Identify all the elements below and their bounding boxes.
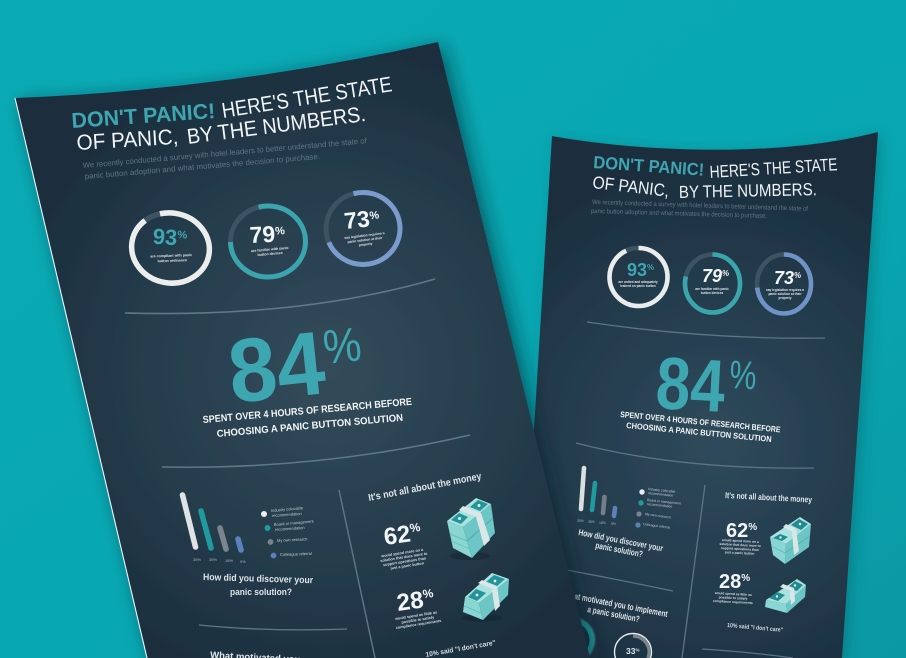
stat caption: right: SPENT OVER 4 HOURS OF RESEARCH BEFORE [620, 410, 781, 434]
stat caption: right: CHOOSING A PANIC BUTTON SOLUTION [626, 421, 772, 444]
heading: discover right: panic solution? [595, 540, 644, 559]
panel: right poster [520, 132, 878, 658]
stat: 28% right: 28 [719, 571, 741, 593]
heading: discover left: How did you discover your [203, 572, 313, 586]
bar chart: left: 18% [225, 558, 233, 563]
ring: 73% right: % [794, 271, 801, 280]
legend: right chart: recommendation [648, 491, 674, 498]
stat: 28% left [394, 585, 442, 630]
heading: discover right: How did you discover your [578, 527, 664, 553]
stat: 84% right: 84 [654, 341, 727, 428]
legend: right chart: My own research [645, 512, 671, 520]
legend: left chart: recommendation [275, 525, 305, 532]
title: left poster: BY THE NUMBERS. [186, 102, 367, 149]
ring: 79% left: button devices [257, 251, 283, 257]
stat: 62% right: 62 [726, 520, 748, 542]
intro text: left poster: panic button adoption and what motivates the decision to purchase. [84, 152, 320, 181]
stat: 62% left: solution that does more to [380, 552, 428, 563]
stat: 62% right: would spend more on a [721, 538, 759, 544]
ring: 73% right [757, 254, 811, 314]
legend: left chart [261, 505, 315, 558]
ring: 79% right: are familiar with panic [695, 287, 729, 291]
stat: 84% right: % [728, 353, 758, 398]
bar chart: right: 35% [577, 519, 584, 523]
stat: 62% left: would spend more on a [380, 548, 424, 559]
legend: right chart: Board or management [647, 498, 681, 506]
stat: 62% left: 62 [382, 520, 412, 551]
ring: 93% left: 93 [152, 224, 178, 250]
stat caption: left: CHOOSING A PANIC BUTTON SOLUTION [216, 413, 404, 440]
title: left poster: DON'T PANIC! [71, 99, 216, 133]
legend: left chart: Colleague referral [280, 551, 312, 557]
icon: money stack large left [447, 498, 495, 560]
icon: money stack small left [462, 573, 509, 622]
stat caption: left [202, 397, 413, 440]
ring: 93% right: 93 [627, 260, 647, 280]
title: right poster [592, 152, 838, 202]
stat: 28% left: % [422, 586, 435, 601]
intro text: right poster: We recently conducted a survey with hotel leaders to better understand the state of [592, 199, 808, 213]
title: right poster: DON'T PANIC! [593, 152, 705, 180]
ring: 79% right: 79 [702, 266, 722, 286]
ring: 93% right [610, 248, 668, 306]
title: left poster: OF PANIC, [76, 125, 179, 155]
ring: 73% right: say legislation requires a [766, 288, 804, 292]
stat: 62% left [379, 519, 430, 572]
heading: discover left: panic solution? [230, 587, 292, 598]
poster sheet: right [520, 132, 878, 658]
title: left poster [71, 72, 394, 155]
ring: 73% left: panic solution at their [347, 236, 383, 244]
ring: 79% right [685, 254, 740, 312]
panel: left poster [15, 42, 590, 658]
stat: 62% right: % [748, 522, 757, 533]
ring: 33%: % [635, 648, 639, 652]
bar chart: right [577, 468, 616, 526]
stat: 62% left: % [409, 520, 422, 535]
stat: 62% right: solution that does more to [719, 542, 761, 548]
bar chart: right: 9% [611, 522, 616, 526]
ring: 79% right: % [722, 269, 729, 278]
ring: 93% left: button ordinance [158, 258, 187, 263]
title: left poster: HERE'S THE STATE [220, 72, 394, 123]
stat: 84% left: 84 [224, 313, 330, 423]
icon: money stack large right [770, 517, 811, 564]
legend: right chart: recommendation [647, 502, 673, 509]
intro text: left poster: We recently conducted a survey with hotel leaders to better understand the state of [82, 136, 368, 170]
stat: 28% left: 28 [395, 586, 425, 617]
ring: motivation teal [549, 617, 595, 658]
ring: 79% left: are familiar with panic [251, 246, 289, 253]
legend: right chart [635, 487, 681, 530]
ring: 93% left [126, 207, 215, 289]
stat: 28% right: % [741, 573, 750, 584]
ring: 33% [614, 634, 652, 658]
stat: 62% right: just a panic button [724, 550, 754, 556]
stat: 28% left: possible to satisfy [401, 615, 435, 625]
ring: 73% left: property [358, 242, 373, 247]
ring: 93% left: % [177, 229, 188, 242]
heading: money left: It's not all about the money [367, 471, 483, 504]
ring: 73% right: property [779, 296, 792, 300]
ring: 93% right: % [647, 263, 654, 272]
legend: left chart: My own research [277, 536, 307, 543]
heading: motivated right: a panic solution? [587, 604, 641, 624]
ring: 93% right: are united and adequately [618, 280, 658, 284]
ring: 79% right: button devices [701, 291, 723, 295]
ring: 79% left [230, 206, 306, 277]
legend: left chart: Board or management [274, 518, 315, 527]
poster sheet: left [15, 42, 590, 658]
bar chart: right: 18% [599, 521, 606, 525]
title: right poster: BY THE NUMBERS. [679, 179, 817, 202]
bar chart: left [182, 495, 246, 564]
legend: right chart: Colleague referral [643, 522, 670, 530]
intro text: right poster [591, 199, 808, 220]
legend: left chart: Industry colocable [271, 505, 304, 513]
bar chart: left: 35% [193, 557, 201, 562]
bar chart: left: 35% [209, 557, 217, 562]
heading: motivated right: What motivated you to implement [564, 589, 669, 619]
heading: money right: It's not all about the money [725, 490, 813, 505]
stat: 84% left: % [321, 318, 364, 375]
stat: 28% left: would spend as little as [394, 610, 438, 621]
ring: 93% right: trained on panic button [620, 284, 656, 288]
heading: discover left [203, 572, 313, 598]
stat: 28% right: compliance requirements [713, 599, 753, 605]
legend: left chart: recommendation [272, 511, 302, 518]
stat: 28% right: would spend as little as [714, 591, 752, 597]
stat: 62% left: support operations than [383, 556, 427, 567]
ring: 93% left: are compliant with panic [150, 253, 192, 259]
ring: 73% left [326, 192, 400, 264]
ring: 79% left: % [275, 225, 285, 238]
note: i don't care right: 10% said "I don't care" [727, 623, 783, 634]
ring: 79% left: 79 [249, 221, 276, 248]
ring: 73% right: 73 [774, 268, 794, 288]
ring: 73% right: panic solution at their [768, 292, 802, 296]
stat: 28% right: possible to satisfy [719, 595, 748, 601]
ring: 73% left: 73 [343, 205, 371, 234]
icon: money stack small right [765, 579, 806, 613]
bar chart: left: 9% [240, 559, 246, 564]
ring: 33%: 33 [626, 646, 635, 656]
stat: 28% left: compliance requirements [396, 619, 442, 630]
legend: right chart: Industry colocable [648, 487, 676, 494]
ring: 73% left: % [369, 209, 380, 222]
title: right poster: HERE'S THE STATE [709, 154, 838, 182]
title: right poster: OF PANIC, [592, 172, 670, 201]
stat: 62% right: support operations than [721, 546, 759, 552]
stat: 62% left: just a panic button [389, 561, 425, 571]
stat: 62% right [719, 520, 761, 556]
stat: 28% right [713, 571, 753, 605]
ring: 73% left: say legislation requires a [344, 231, 385, 240]
intro text: right poster: panic button adoption and what motivates the decision to purchase. [591, 208, 767, 220]
bar chart: right: 35% [588, 520, 595, 524]
stat caption: left: SPENT OVER 4 HOURS OF RESEARCH BEFORE [202, 397, 413, 426]
